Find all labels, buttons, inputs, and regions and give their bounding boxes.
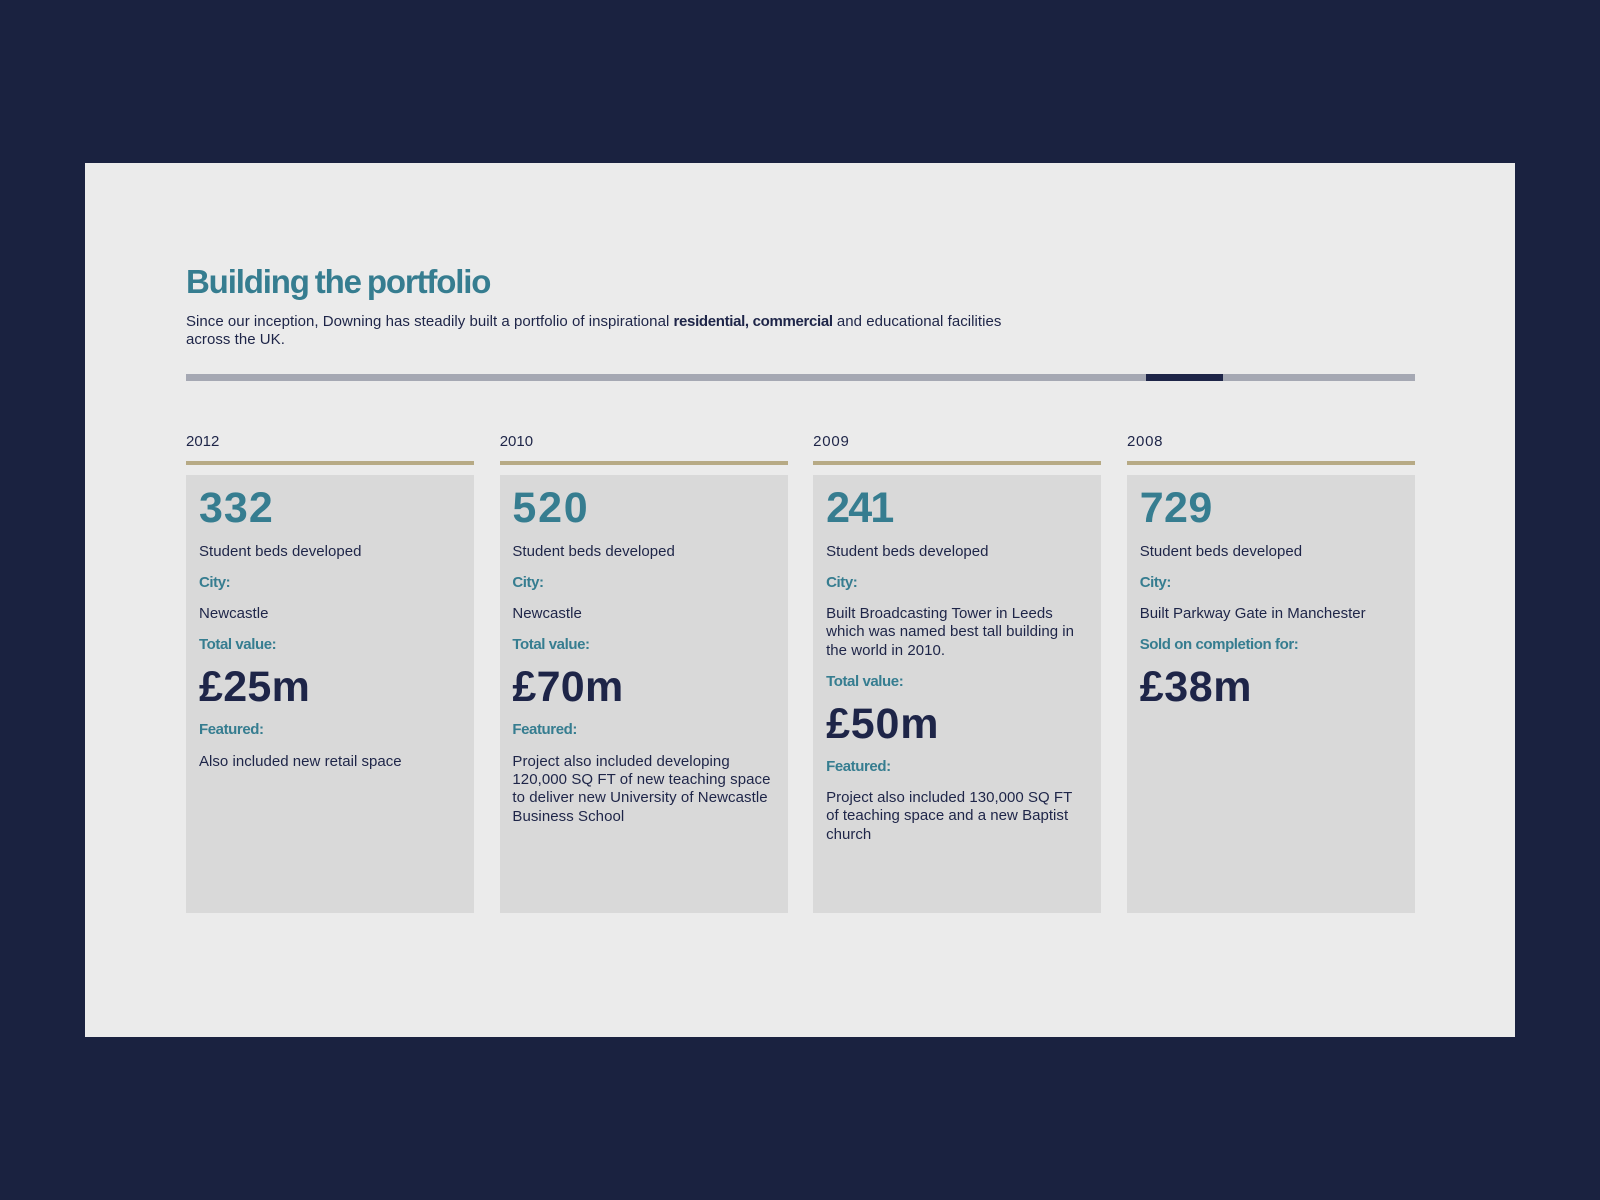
featured text — [512, 752, 771, 825]
featured text: 120,000 SQ FT of new teaching space — [512, 771, 771, 788]
year: 2009 — [813, 433, 850, 450]
featured text: of teaching space and a new Baptist — [826, 807, 1068, 824]
stat caption: Student beds developed — [199, 542, 361, 560]
total value label: Total value: — [512, 636, 590, 653]
total value label: Total value: — [826, 673, 903, 690]
city value: Newcastle — [512, 605, 582, 622]
panel: portfolio — [85, 163, 1515, 1037]
city label: City: — [199, 574, 230, 591]
sold value: £38m — [1140, 663, 1252, 711]
gold rule — [813, 461, 1101, 465]
featured text: church — [826, 826, 871, 843]
stat number: 332 — [199, 484, 274, 532]
card — [813, 475, 1101, 913]
city value: Newcastle — [199, 605, 268, 622]
city label: City: — [1140, 574, 1171, 591]
stat number: 520 — [512, 484, 590, 532]
intro text — [186, 313, 1001, 348]
total value: £50m — [826, 700, 939, 748]
city label: City: — [512, 574, 544, 591]
city value: which was named best tall building in — [826, 623, 1074, 640]
timeline progress bar — [186, 374, 1415, 380]
city value: Built Parkway Gate in Manchester — [1140, 605, 1366, 622]
gold rule — [500, 461, 788, 465]
year: 2012 — [186, 433, 219, 450]
featured text: to deliver new University of Newcastle — [512, 789, 768, 806]
featured label: Featured: — [826, 758, 891, 775]
card — [1127, 475, 1415, 913]
column: 2009 — [813, 433, 1101, 913]
total value: £25m — [199, 663, 310, 711]
column: 2008 — [1127, 433, 1415, 913]
sold on completion label: Sold on completion for: — [1140, 636, 1298, 653]
intro text: across the UK. — [186, 331, 285, 348]
total value: £70m — [512, 663, 624, 711]
card — [186, 475, 474, 913]
title: Building the portfolio — [186, 263, 490, 300]
city value: Built Broadcasting Tower in Leeds — [826, 605, 1053, 622]
city value — [826, 605, 1074, 659]
year: 2008 — [1127, 433, 1163, 450]
intro text: Since our inception, Downing has steadily built a portfolio of inspirational residential, commercial and educational facilities — [186, 313, 1001, 330]
featured text: Project also included 130,000 SQ FT — [826, 789, 1072, 806]
city label: City: — [826, 574, 857, 591]
featured text: Also included new retail space — [199, 752, 402, 770]
stat number: 241 — [826, 484, 892, 532]
featured text: Business School — [512, 808, 624, 825]
card — [500, 475, 788, 913]
column: 2012 — [186, 433, 474, 913]
featured text — [826, 789, 1072, 843]
featured label: Featured: — [199, 721, 264, 738]
featured text: Project also included developing — [512, 752, 730, 770]
stat caption: Student beds developed — [826, 542, 989, 560]
year: 2010 — [500, 433, 533, 450]
gold rule — [186, 461, 474, 465]
gold rule — [1127, 461, 1415, 465]
city value: the world in 2010. — [826, 642, 945, 659]
stat number: 729 — [1140, 484, 1213, 532]
total value label: Total value: — [199, 636, 276, 653]
stat caption: Student beds developed — [1140, 542, 1302, 560]
column: 2010 — [500, 433, 788, 913]
timeline active segment — [1146, 374, 1223, 380]
featured label: Featured: — [512, 721, 577, 738]
stat caption: Student beds developed — [512, 542, 675, 560]
